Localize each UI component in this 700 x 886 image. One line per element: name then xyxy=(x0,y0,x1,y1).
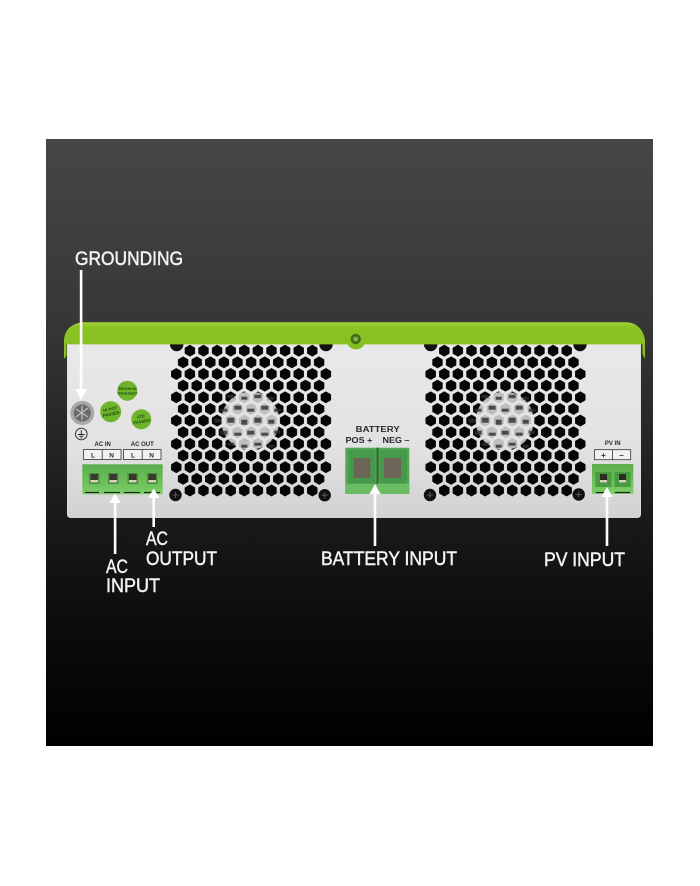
arrow: PV input xyxy=(601,487,613,546)
label: AC input: INPUT xyxy=(106,575,160,597)
label: PV input: PV INPUT xyxy=(544,549,625,571)
right fan grille xyxy=(426,345,585,496)
AC terminal labels: N xyxy=(109,452,114,459)
ground symbol xyxy=(76,428,87,440)
sticker: ate passed xyxy=(130,408,153,431)
label: AC output: AC xyxy=(146,528,168,550)
battery terminal labels: BATTERY xyxy=(356,424,400,434)
label: grounding: GROUNDING xyxy=(75,248,183,270)
PV terminal block xyxy=(592,464,633,494)
sticker: ate passed: ATE xyxy=(136,413,145,420)
PV terminal labels xyxy=(594,441,631,460)
arrow: AC output xyxy=(148,488,159,527)
arrow: grounding xyxy=(76,270,87,400)
top band screw xyxy=(347,334,365,350)
sticker: ate passed: PASSED xyxy=(133,418,150,425)
AC terminal labels: L xyxy=(91,452,95,459)
AC terminal labels: AC OUT xyxy=(131,442,154,448)
grounding bolt xyxy=(70,401,94,425)
label: battery input: BATTERY INPUT xyxy=(321,548,457,570)
AC terminal labels: N xyxy=(149,452,154,459)
PV terminal labels: + xyxy=(601,451,606,460)
sticker: current: CERTIFIED xyxy=(117,391,137,395)
AC terminal labels: L xyxy=(131,452,135,459)
battery terminal labels xyxy=(346,424,410,445)
AC terminal labels xyxy=(84,442,161,460)
label: AC output: OUTPUT xyxy=(146,548,217,570)
PV terminal labels: – xyxy=(619,451,624,460)
label: AC input: AC xyxy=(106,556,128,578)
device body xyxy=(68,340,640,518)
arrow: AC input xyxy=(110,494,121,554)
arrow: battery input xyxy=(369,484,381,546)
sticker: current: IN HOUSE xyxy=(118,386,136,390)
left fan grille xyxy=(171,345,331,496)
battery terminal block xyxy=(345,448,409,494)
green top band xyxy=(64,322,645,359)
battery terminal labels: NEG – xyxy=(382,436,410,445)
sticker: hi-pot passed: HI-POT xyxy=(103,405,118,413)
sticker: current xyxy=(117,381,137,401)
grille screws xyxy=(169,338,587,501)
AC terminal labels: AC IN xyxy=(95,442,111,448)
AC terminal block xyxy=(82,464,163,494)
sticker: hi-pot passed xyxy=(98,399,123,424)
PV terminal labels: PV IN xyxy=(605,441,621,447)
device: inverter rear panel xyxy=(64,322,645,518)
sticker: hi-pot passed: PASSED xyxy=(102,410,120,418)
panel: dark background xyxy=(46,139,653,746)
battery terminal labels: POS + xyxy=(346,436,373,445)
label: AC output xyxy=(146,528,217,570)
label: AC input xyxy=(106,556,160,597)
